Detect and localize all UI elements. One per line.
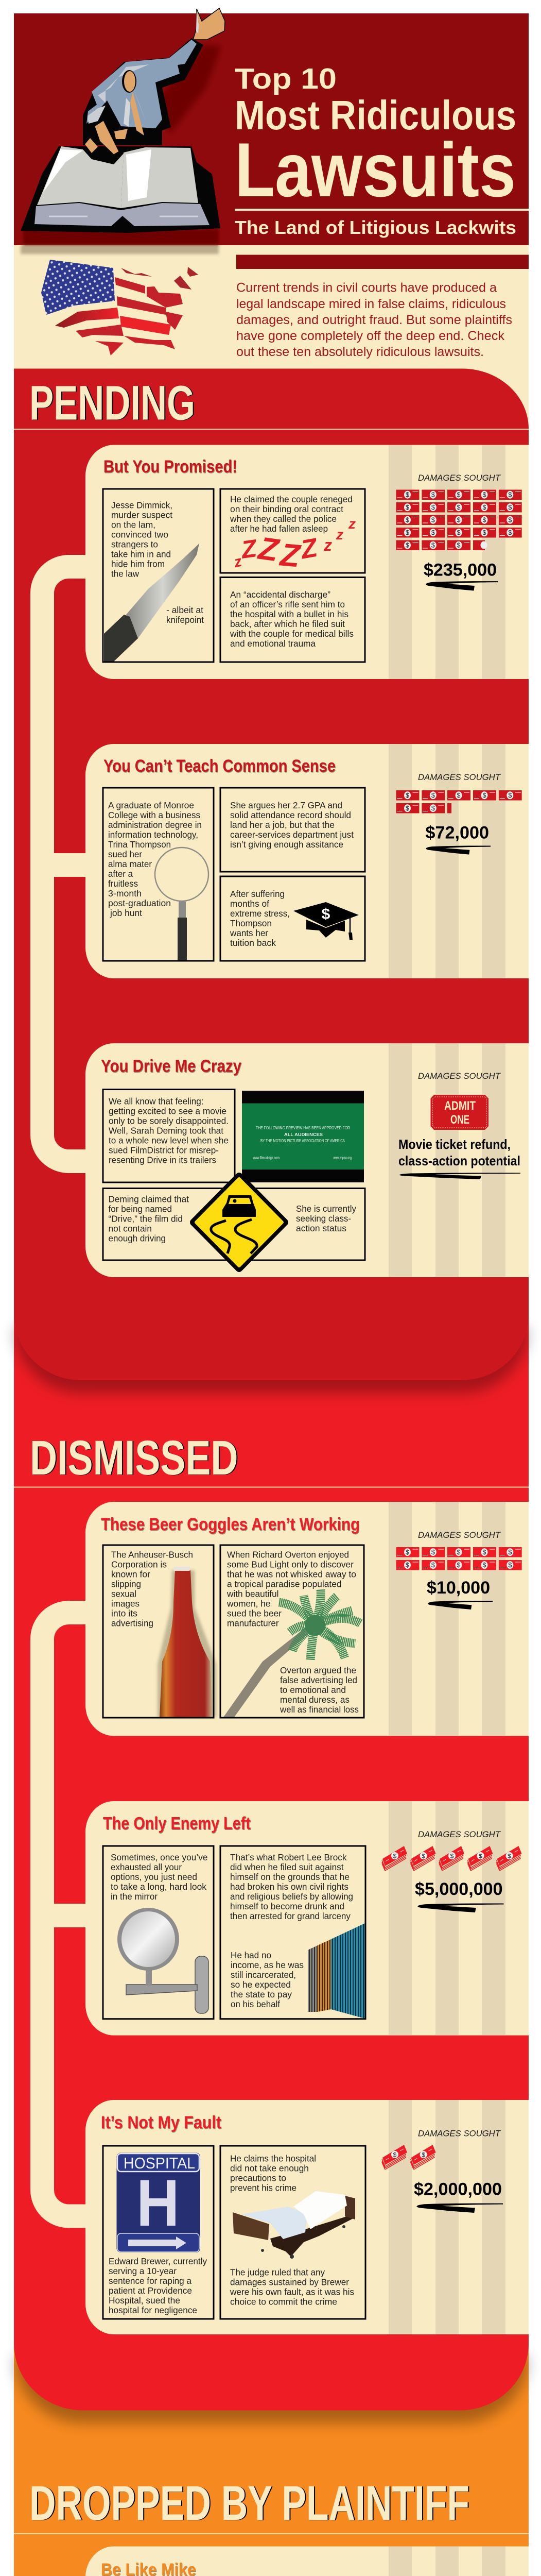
box: the mirror: in the mirror — [111, 1891, 158, 1902]
box: Edward Brewer: serving a 10-year — [109, 2266, 177, 2276]
box: the mirror — [103, 1846, 214, 2019]
damages: $5,000,000: DAMAGES SOUGHT — [418, 1829, 501, 1839]
intro text — [236, 280, 512, 359]
damages: movie ticket refund: DAMAGES SOUGHT — [418, 1071, 501, 1081]
icon: slippery road sign — [194, 1176, 285, 1268]
box: tuition: Thompson — [230, 918, 272, 928]
icon: admit one ticket — [430, 1095, 488, 1130]
box: Anheuser-Busch: sexual — [111, 1589, 136, 1599]
heading: DISMISSED: DISMISSED — [30, 1431, 238, 1485]
title — [235, 62, 529, 238]
box: hospital claims: were his own fault, as it was his — [230, 2286, 354, 2297]
heading: PENDING: PENDING — [30, 376, 196, 431]
heading: PENDING — [14, 376, 529, 431]
icon: admit one ticket: ADMIT — [444, 1099, 476, 1113]
damages: $5,000,000: $5,000,000 — [415, 1879, 503, 1899]
title: But You Promised! — [103, 457, 237, 477]
box: the mirror: to take a long, hard look — [111, 1882, 206, 1892]
box: not enough driving: She is currently — [296, 1204, 356, 1214]
icon: hospital bed — [233, 2191, 355, 2259]
box: Richard Overton: manufacturer — [227, 1618, 279, 1628]
movie preview screen — [242, 1091, 364, 1182]
damages: $72,000 — [396, 772, 522, 855]
box: GPA: isn’t giving enough assitance — [230, 839, 343, 850]
box: tuition: months of — [230, 899, 269, 909]
box: Anheuser-Busch: slipping — [111, 1579, 141, 1589]
box: binding oral contract — [220, 489, 365, 574]
box: Robert Lee Brock: on his behalf — [231, 1999, 280, 2009]
damages: $235,000: $235,000 — [424, 561, 497, 580]
box: Jesse Dimmick: convinced two — [111, 530, 168, 540]
icon: jail cells — [308, 1923, 365, 2019]
box: tuition: After suffering — [230, 889, 285, 899]
box: Anheuser-Busch: The Anheuser-Busch — [111, 1550, 193, 1560]
damages: $5,000,000 — [382, 1829, 522, 1912]
box: Edward Brewer: Hospital, sued the — [109, 2295, 180, 2306]
box: Robert Lee Brock: had broken his own civil rights — [230, 1882, 348, 1892]
card: These Beer Goggles Aren't Working — [85, 1502, 529, 1736]
icon: sleeping Zs: Z — [238, 535, 259, 564]
box: Trina Thompson: administration degree in — [108, 820, 202, 830]
movie preview screen: THE FOLLOWING PREVIEW HAS BEEN APPROVED FOR — [256, 1125, 350, 1130]
box: accidental discharge: back, after which he filed suit — [230, 619, 345, 629]
box: Jesse Dimmick: the law — [111, 569, 139, 579]
box: the mirror: exhausted all your — [111, 1862, 182, 1872]
box: Richard Overton: women, he — [226, 1598, 271, 1608]
icon: admit one ticket: ONE — [450, 1113, 469, 1127]
intro text: Current trends in civil courts have produced a — [236, 280, 497, 295]
icon: palm tree — [223, 1589, 360, 1717]
icon: sleeping Zs — [232, 516, 356, 574]
title: You Can’t Teach Common Sense — [103, 756, 336, 776]
shadow under section 2 — [14, 2356, 529, 2424]
icon: beer bottle — [158, 1567, 216, 1717]
section 1 background: pending — [14, 369, 529, 1380]
box: GPA: career-services department just — [230, 829, 354, 840]
box: Anheuser-Busch: Corporation is — [111, 1559, 167, 1569]
box: hospital claims — [220, 2146, 365, 2319]
damages: $72,000: $72,000 — [425, 823, 489, 843]
section 2 background: dismissed — [14, 1288, 529, 2410]
box: Sarah Deming: Well, Sarah Deming took that — [109, 1125, 223, 1136]
box: hospital claims: The judge ruled that any — [230, 2267, 325, 2277]
heading: DISMISSED: DISMISSED — [31, 1431, 239, 1486]
box: Robert Lee Brock: and religious beliefs by allowing — [230, 1891, 353, 1902]
box: Richard Overton: When Richard Overton enjoyed — [227, 1550, 349, 1560]
header band — [14, 8, 529, 254]
icon: magnifying glass — [155, 848, 208, 960]
box: Robert Lee Brock: the state to pay — [231, 1989, 292, 1999]
connector tubes — [42, 567, 85, 2576]
box: tuition: wants her — [230, 928, 268, 938]
box: Robert Lee Brock: himself to become drunk and — [230, 1901, 344, 1911]
box: Richard Overton: a tropical paradise populated — [227, 1579, 342, 1589]
box: Trina Thompson — [103, 788, 214, 961]
icon: hospital sign — [116, 2153, 200, 2252]
box: GPA: solid attendance record should — [230, 810, 351, 820]
icon: sleeping Zs: Z — [278, 537, 302, 574]
box: Trina Thompson: A graduate of Monroe — [108, 800, 194, 810]
box: Jesse Dimmick: murder suspect — [111, 510, 172, 520]
box: Trina Thompson: alma mater — [108, 859, 152, 869]
box: Sarah Deming: sued FilmDistrict for misrep- — [109, 1145, 219, 1155]
box: Sarah Deming — [103, 1089, 235, 1182]
box: Trina Thompson: 3-month — [108, 888, 142, 899]
box: Anheuser-Busch: images — [111, 1598, 139, 1608]
damages: movie ticket refund: Movie ticket refund, — [398, 1137, 511, 1152]
icon: sleeping Zs: z — [232, 553, 243, 571]
damages: $2,000,000: DAMAGES SOUGHT — [418, 2129, 501, 2138]
illustration: lawyer swearing on a book — [21, 8, 225, 254]
damages: $235,000 — [396, 473, 522, 590]
damages: movie ticket refund: class-action potential — [398, 1153, 520, 1168]
icon: sleeping Zs: z — [348, 516, 356, 532]
box: Anheuser-Busch — [103, 1545, 216, 1718]
intro text: out these ten absolutely ridiculous lawsuits. — [236, 345, 484, 359]
box: Richard Overton: that he was not whisked away to — [227, 1569, 356, 1580]
box: binding oral contract: on their binding oral contract — [230, 504, 343, 514]
box: GPA — [220, 788, 365, 872]
box: Edward Brewer: hospital for negligence — [109, 2305, 197, 2315]
box: Anheuser-Busch: advertising — [111, 1618, 153, 1628]
title: The Only Enemy Left — [103, 1814, 251, 1833]
title: You Drive Me Crazy — [101, 1056, 241, 1076]
title: Top 10 — [235, 62, 337, 95]
box: Sarah Deming: getting excited to see a movie — [109, 1106, 226, 1116]
box: Trina Thompson: after a — [108, 869, 133, 879]
box: Richard Overton: Overton argued the — [280, 1665, 356, 1675]
card: The Only Enemy Left — [85, 1801, 529, 2036]
box: Edward Brewer: patient at Providence — [109, 2285, 192, 2296]
intro text: damages, and outright fraud. But some plaintiffs — [236, 313, 512, 327]
box: not enough driving: not contain — [108, 1223, 152, 1233]
box: Jesse Dimmick: Jesse Dimmick, — [111, 500, 172, 510]
box: Jesse Dimmick: - albeit at — [166, 605, 203, 615]
shadow under section 1 — [14, 1327, 529, 1393]
damages: $2,000,000: $2,000,000 — [414, 2179, 502, 2199]
box: Richard Overton — [220, 1545, 364, 1718]
box: Anheuser-Busch: known for — [111, 1569, 150, 1580]
box: binding oral contract: He claimed the couple reneged — [230, 494, 353, 504]
damages: $235,000: DAMAGES SOUGHT — [418, 473, 501, 483]
intro text: legal landscape mired in false claims, ridiculous — [236, 297, 506, 311]
box: Edward Brewer: sentence for raping a — [109, 2276, 191, 2286]
box: hospital claims: prevent his crime — [230, 2182, 296, 2193]
box: accidental discharge: the hospital with a bullet in his — [230, 609, 348, 619]
box: Jesse Dimmick: strangers to — [111, 539, 158, 549]
box: Robert Lee Brock: himself on the grounds that he — [230, 1872, 350, 1882]
box: tuition: tuition back — [230, 938, 276, 948]
box: accidental discharge: An “accidental discharge” — [230, 589, 330, 600]
box: accidental discharge: and emotional trauma — [230, 638, 316, 649]
icon: graduation cap: $ — [322, 906, 330, 923]
box: Richard Overton: false advertising led — [280, 1675, 357, 1685]
box: Sarah Deming: resenting Drive in its trailers — [109, 1155, 216, 1165]
box: GPA: She argues her 2.7 GPA and — [230, 800, 342, 810]
box: accidental discharge: of an officer’s rifle sent him to — [230, 599, 345, 609]
box: Jesse Dimmick — [103, 489, 214, 662]
intro text: have gone completely off the deep end. Check — [236, 329, 504, 343]
icon: sleeping Zs: Z — [298, 532, 320, 565]
box: Anheuser-Busch: into its — [111, 1608, 137, 1619]
title: These Beer Goggles Aren’t Working — [101, 1515, 360, 1534]
box: GPA: land her a job, but that the — [230, 820, 335, 830]
box: hospital claims: did not take enough — [230, 2163, 309, 2173]
box: not enough driving: action status — [296, 1223, 346, 1233]
icon: mirror — [117, 1908, 208, 2013]
box: Richard Overton: well as financial loss — [280, 1704, 359, 1715]
box: hospital claims: He claims the hospital — [230, 2154, 316, 2164]
heading: DISMISSED — [14, 1431, 529, 1488]
section 3 background: dropped by plaintiff — [14, 2318, 529, 2576]
box: Trina Thompson: post-graduation — [108, 898, 171, 908]
box: Robert Lee Brock: so he expected — [231, 1979, 291, 1990]
box: not enough driving: “Drive,” the film did — [108, 1214, 183, 1224]
red bar — [236, 255, 529, 269]
damages: movie ticket refund — [398, 1071, 520, 1179]
box: tuition: extreme stress, — [230, 908, 290, 919]
box: tuition — [220, 876, 365, 961]
box: Sarah Deming: only to be sorely disappointed. — [109, 1116, 229, 1126]
box: Sarah Deming: to a whole new level when she — [109, 1136, 229, 1146]
box: Jesse Dimmick: knifepoint — [166, 615, 204, 625]
box: Robert Lee Brock: still incarcerated, — [231, 1970, 296, 1980]
box: Edward Brewer — [103, 2146, 214, 2319]
card: You Can't Teach Common Sense — [85, 744, 529, 978]
box: Trina Thompson: sued her — [108, 849, 142, 859]
card: But You Promised! — [85, 445, 529, 679]
box: the mirror: Sometimes, once you’ve — [111, 1852, 208, 1862]
icon: sleeping Zs: Z — [255, 530, 282, 569]
box: not enough driving: Deming claimed that — [108, 1194, 189, 1205]
box: accidental discharge: with the couple for medical bills — [230, 629, 354, 639]
box: hospital claims: choice to commit the crime — [230, 2297, 337, 2307]
movie preview screen: www.mpaa.org — [333, 1155, 352, 1160]
box: Richard Overton: sued the beer — [227, 1608, 282, 1619]
damages: $10,000: $10,000 — [427, 1578, 490, 1598]
icon: hospital sign: H — [136, 2166, 179, 2240]
box: Robert Lee Brock: did when he filed suit against — [230, 1862, 344, 1872]
damages: $10,000: DAMAGES SOUGHT — [418, 1530, 501, 1540]
movie preview screen: www.filmratings.com — [252, 1155, 280, 1160]
box: binding oral contract: when they called the police — [230, 514, 337, 524]
box: Sarah Deming: We all know that feeling: — [109, 1096, 204, 1107]
box: Richard Overton: some Bud Light only to discover — [227, 1559, 354, 1569]
box: Richard Overton: to emotional and — [280, 1685, 346, 1695]
box: hospital claims: damages sustained by Brewer — [230, 2277, 349, 2287]
title: It’s Not My Fault — [101, 2113, 221, 2132]
icon: hospital sign: HOSPITAL — [124, 2154, 195, 2172]
heading: PENDING: PENDING — [29, 376, 195, 431]
box: Richard Overton: with beautiful — [226, 1589, 279, 1599]
box: Edward Brewer: Edward Brewer, currently — [109, 2256, 207, 2266]
card: You Drive Me Crazy — [85, 1043, 529, 1277]
box: the mirror: options, you just need — [111, 1872, 197, 1882]
box: not enough driving — [103, 1188, 365, 1260]
box: Jesse Dimmick: take him in and — [111, 549, 171, 560]
box: Trina Thompson: College with a business — [108, 810, 200, 820]
box: not enough driving: seeking class- — [296, 1213, 351, 1224]
box: Robert Lee Brock: He had no — [231, 1950, 271, 1960]
box: Robert Lee Brock: income, as he was — [231, 1960, 304, 1970]
box: accidental discharge — [220, 577, 365, 662]
movie preview screen: BY THE MOTION PICTURE ASSOCIATION OF AMERICA — [260, 1138, 345, 1143]
box: not enough driving: enough driving — [108, 1233, 166, 1244]
box: binding oral contract: after he had fallen asleep — [230, 523, 328, 534]
box: Trina Thompson: job hunt — [110, 908, 142, 918]
intro — [41, 255, 529, 359]
box: Robert Lee Brock — [220, 1846, 365, 2019]
icon: graduation cap — [293, 902, 359, 940]
box: not enough driving: for being named — [108, 1204, 172, 1214]
damages: $2,000,000 — [382, 2129, 503, 2213]
box: Trina Thompson: Trina Thompson — [108, 839, 171, 850]
damages: $72,000: DAMAGES SOUGHT — [418, 772, 501, 782]
box: Jesse Dimmick: hide him from — [111, 558, 165, 569]
box: hospital claims: precautions to — [230, 2173, 286, 2183]
icon: sleeping Zs: z — [336, 527, 343, 543]
damages: $10,000 — [396, 1530, 522, 1609]
box: Robert Lee Brock: then arrested for grand larceny — [230, 1911, 351, 1921]
box: Richard Overton: mental duress, as — [280, 1694, 350, 1705]
box: Trina Thompson: fruitless — [108, 878, 138, 889]
box: Trina Thompson: information technology, — [108, 829, 198, 840]
icon: US map flag — [41, 260, 198, 355]
icon: sleeping Zs: z — [323, 536, 332, 554]
box: Jesse Dimmick: on the lam, — [111, 519, 155, 530]
box: Robert Lee Brock: That’s what Robert Lee Brock — [230, 1852, 347, 1862]
movie preview screen: ALL AUDIENCES — [284, 1132, 323, 1137]
card: Be Like Mike — [85, 2546, 529, 2576]
card: It's Not My Fault — [85, 2100, 529, 2334]
title: The Land of Litigious Lackwits — [235, 217, 516, 238]
